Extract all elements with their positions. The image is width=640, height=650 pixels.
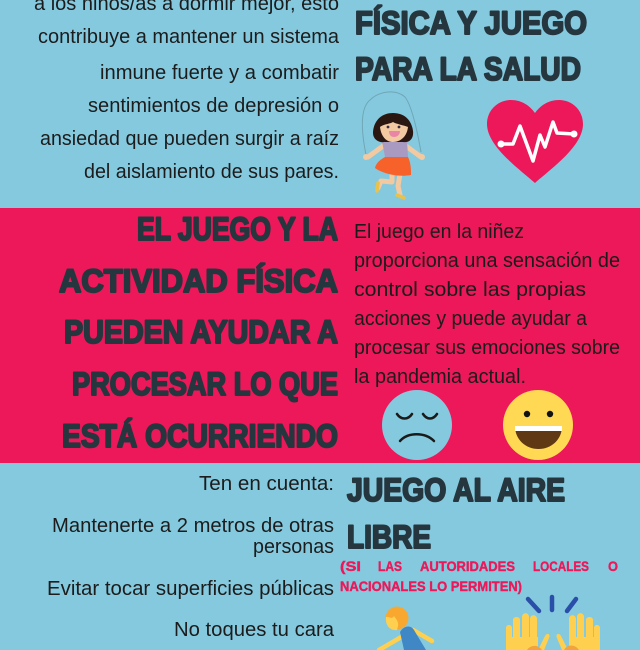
heading: física y juego para la salud <box>355 5 587 87</box>
heading: juego al aire libre: JUEGO AL AIRE <box>347 472 565 508</box>
icon: girl jumping rope <box>362 92 425 198</box>
heading: juego al aire libre <box>347 472 565 555</box>
text block: authorities note: O <box>608 558 618 574</box>
icon: happy face <box>503 390 573 460</box>
text block: ten en cuenta list: Ten en cuenta: <box>199 473 334 495</box>
text block: authorities note: AUTORIDADES <box>420 558 515 574</box>
heading: el juego y la actividad física: EL JUEGO Y LA <box>137 211 338 247</box>
text block: authorities note: (SI <box>340 558 361 574</box>
heading: el juego y la actividad física: PUEDEN AYUDAR A <box>64 314 338 350</box>
icon: raised hands <box>506 597 600 650</box>
icon: heart with pulse line <box>487 100 583 183</box>
text block: health benefits: contribuye a mantener un sistema <box>38 26 340 48</box>
text block: sense of control: procesar sus emociones sobre <box>354 337 620 359</box>
text block: authorities note: LAS <box>378 558 402 574</box>
panel: background top <box>0 0 640 208</box>
heading: física y juego para la salud: PARA LA SALUD <box>355 51 581 87</box>
text block: health benefits <box>34 0 340 183</box>
text block: authorities note <box>340 558 618 594</box>
text block: ten en cuenta list: Mantenerte a 2 metros de otras <box>52 515 334 537</box>
text block: sense of control: acciones y puede ayudar a <box>354 308 588 330</box>
text block: sense of control: la pandemia actual. <box>354 366 526 388</box>
text block: sense of control: El juego en la niñez <box>354 221 524 243</box>
text block: sense of control: control sobre las propias <box>354 279 586 301</box>
heading: el juego y la actividad física: ACTIVIDAD FÍSICA <box>59 263 338 299</box>
heading: el juego y la actividad física: ESTÁ OCURRIENDO <box>62 418 338 454</box>
text block: ten en cuenta list: personas <box>253 536 334 558</box>
icon: running child <box>379 606 432 650</box>
heading: juego al aire libre: LIBRE <box>347 519 431 555</box>
heading: el juego y la actividad física: PROCESAR LO QUE <box>72 366 338 402</box>
text block: sense of control <box>354 221 620 388</box>
text block: health benefits: sentimientos de depresión o <box>88 95 339 117</box>
icon: sad face <box>382 390 452 460</box>
text block: authorities note: NACIONALES LO PERMITEN) <box>340 578 522 594</box>
text block: ten en cuenta list: No toques tu cara <box>174 619 335 641</box>
panel: background bottom <box>0 463 640 650</box>
panel: red band <box>0 208 640 463</box>
text block: ten en cuenta list: Evitar tocar superficies públicas <box>47 578 334 600</box>
text block: health benefits: ansiedad que pueden surgir a raíz <box>40 128 339 150</box>
heading: el juego y la actividad física <box>59 211 338 454</box>
heading: física y juego para la salud: FÍSICA Y JUEGO <box>355 5 587 41</box>
text block: health benefits: del aislamiento de sus pares. <box>84 161 339 183</box>
text block: authorities note: LOCALES <box>533 558 589 574</box>
text block: sense of control: proporciona una sensación de <box>354 250 620 272</box>
text block: ten en cuenta list <box>47 473 335 641</box>
text block: health benefits: inmune fuerte y a combatir <box>100 62 339 84</box>
